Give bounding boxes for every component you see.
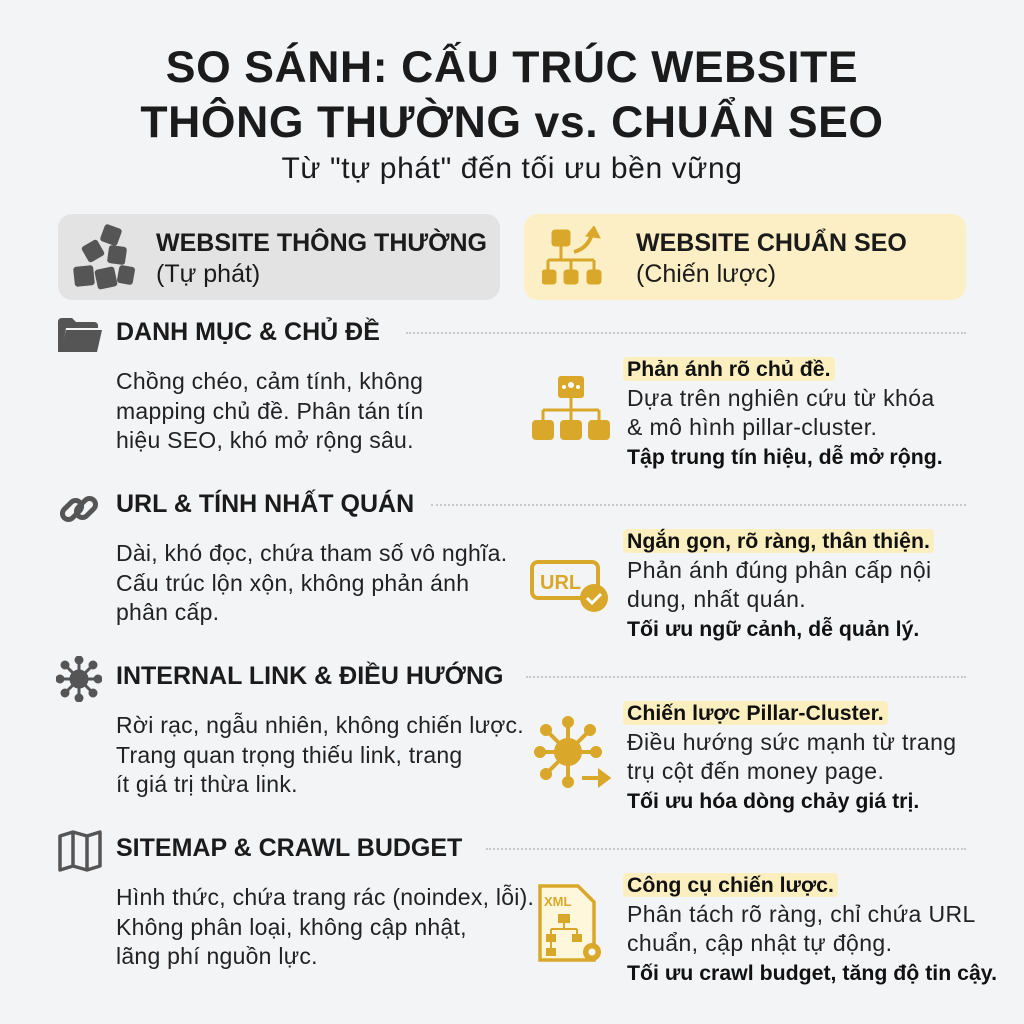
right text: Điều hướng sức mạnh từ trang [627, 729, 956, 755]
header: website thong thuong [58, 214, 500, 300]
left text: ít giá trị thừa link. [116, 771, 298, 797]
header text [636, 228, 907, 288]
right text: Tập trung tín hiệu, dễ mở rộng. [627, 445, 943, 469]
right text: Phản ánh đúng phân cấp nội [627, 557, 932, 583]
section 2: url [60, 490, 966, 641]
left text [116, 884, 534, 969]
header text: WEBSITE THÔNG THƯỜNG [156, 229, 487, 257]
right text [623, 528, 934, 641]
section 3: internal link [56, 656, 966, 813]
right text: Chiến lược Pillar-Cluster. [627, 701, 884, 725]
subtitle: Từ "tự phát" đến tối ưu bền vững [281, 152, 743, 185]
heading: DANH MỤC & CHỦ ĐỀ [116, 318, 380, 346]
right text: Ngắn gọn, rõ ràng, thân thiện. [627, 529, 930, 553]
right text: Công cụ chiến lược. [627, 873, 834, 897]
icon: url check: URL [540, 572, 581, 594]
icon: hub [534, 716, 612, 788]
header text: (Tự phát) [156, 260, 260, 288]
left text [116, 712, 524, 797]
icon: scattered blocks [73, 224, 135, 290]
icon: network [56, 656, 102, 702]
left text: Chồng chéo, cảm tính, không [116, 368, 423, 394]
right text: Tối ưu crawl budget, tăng độ tin cậy. [627, 961, 997, 985]
section 1: danh muc [58, 317, 966, 469]
heading: URL & TÍNH NHẤT QUÁN [116, 490, 414, 518]
right text [623, 873, 997, 985]
right text: chuẩn, cập nhật tự động. [627, 930, 892, 956]
right text [623, 701, 956, 813]
title: SO SÁNH: CẤU TRÚC WEBSITE [166, 43, 858, 92]
section 4: sitemap [58, 830, 997, 985]
header text: (Chiến lược) [636, 260, 776, 288]
right text: Tối ưu ngữ cảnh, dễ quản lý. [627, 617, 919, 641]
header: website chuan seo [524, 214, 966, 300]
left text: phân cấp. [116, 599, 219, 625]
left text [116, 368, 424, 453]
left text: Không phân loại, không cập nhật, [116, 914, 467, 940]
right text: dung, nhất quán. [627, 586, 806, 612]
right text: Dựa trên nghiên cứu từ khóa [627, 385, 935, 411]
left text: Rời rạc, ngẫu nhiên, không chiến lược. [116, 712, 524, 738]
icon: topic tree [532, 376, 610, 440]
left text [116, 540, 507, 625]
right text: trụ cột đến money page. [627, 758, 884, 784]
left text: Cấu trúc lộn xộn, không phản ánh [116, 570, 469, 596]
right text [623, 357, 943, 469]
icon: folder [58, 318, 102, 352]
icon: url check [530, 560, 608, 612]
left text: Dài, khó đọc, chứa tham số vô nghĩa. [116, 540, 507, 566]
right text: Phân tách rõ ràng, chỉ chứa URL [627, 901, 976, 927]
heading: INTERNAL LINK & ĐIỀU HƯỚNG [116, 662, 503, 690]
icon: xml sitemap: XML [544, 894, 572, 909]
header text: WEBSITE CHUẨN SEO [636, 229, 907, 257]
left text: mapping chủ đề. Phân tán tín [116, 398, 424, 424]
icon: link [60, 496, 98, 522]
icon: map [58, 830, 102, 872]
icon: xml sitemap [538, 884, 601, 962]
left text: hiệu SEO, khó mở rộng sâu. [116, 427, 414, 453]
left text: Hình thức, chứa trang rác (noindex, lỗi). [116, 884, 534, 910]
header text [156, 228, 487, 288]
left text: Trang quan trọng thiếu link, trang [116, 742, 462, 768]
heading: SITEMAP & CRAWL BUDGET [116, 834, 462, 862]
icon: hierarchy arrow [542, 226, 602, 284]
right text: Phản ánh rõ chủ đề. [627, 357, 831, 381]
title: THÔNG THƯỜNG vs. CHUẨN SEO [140, 98, 884, 147]
title [140, 42, 884, 147]
left text: lãng phí nguồn lực. [116, 943, 318, 969]
right text: & mô hình pillar-cluster. [627, 414, 877, 440]
right text: Tối ưu hóa dòng chảy giá trị. [627, 789, 919, 813]
